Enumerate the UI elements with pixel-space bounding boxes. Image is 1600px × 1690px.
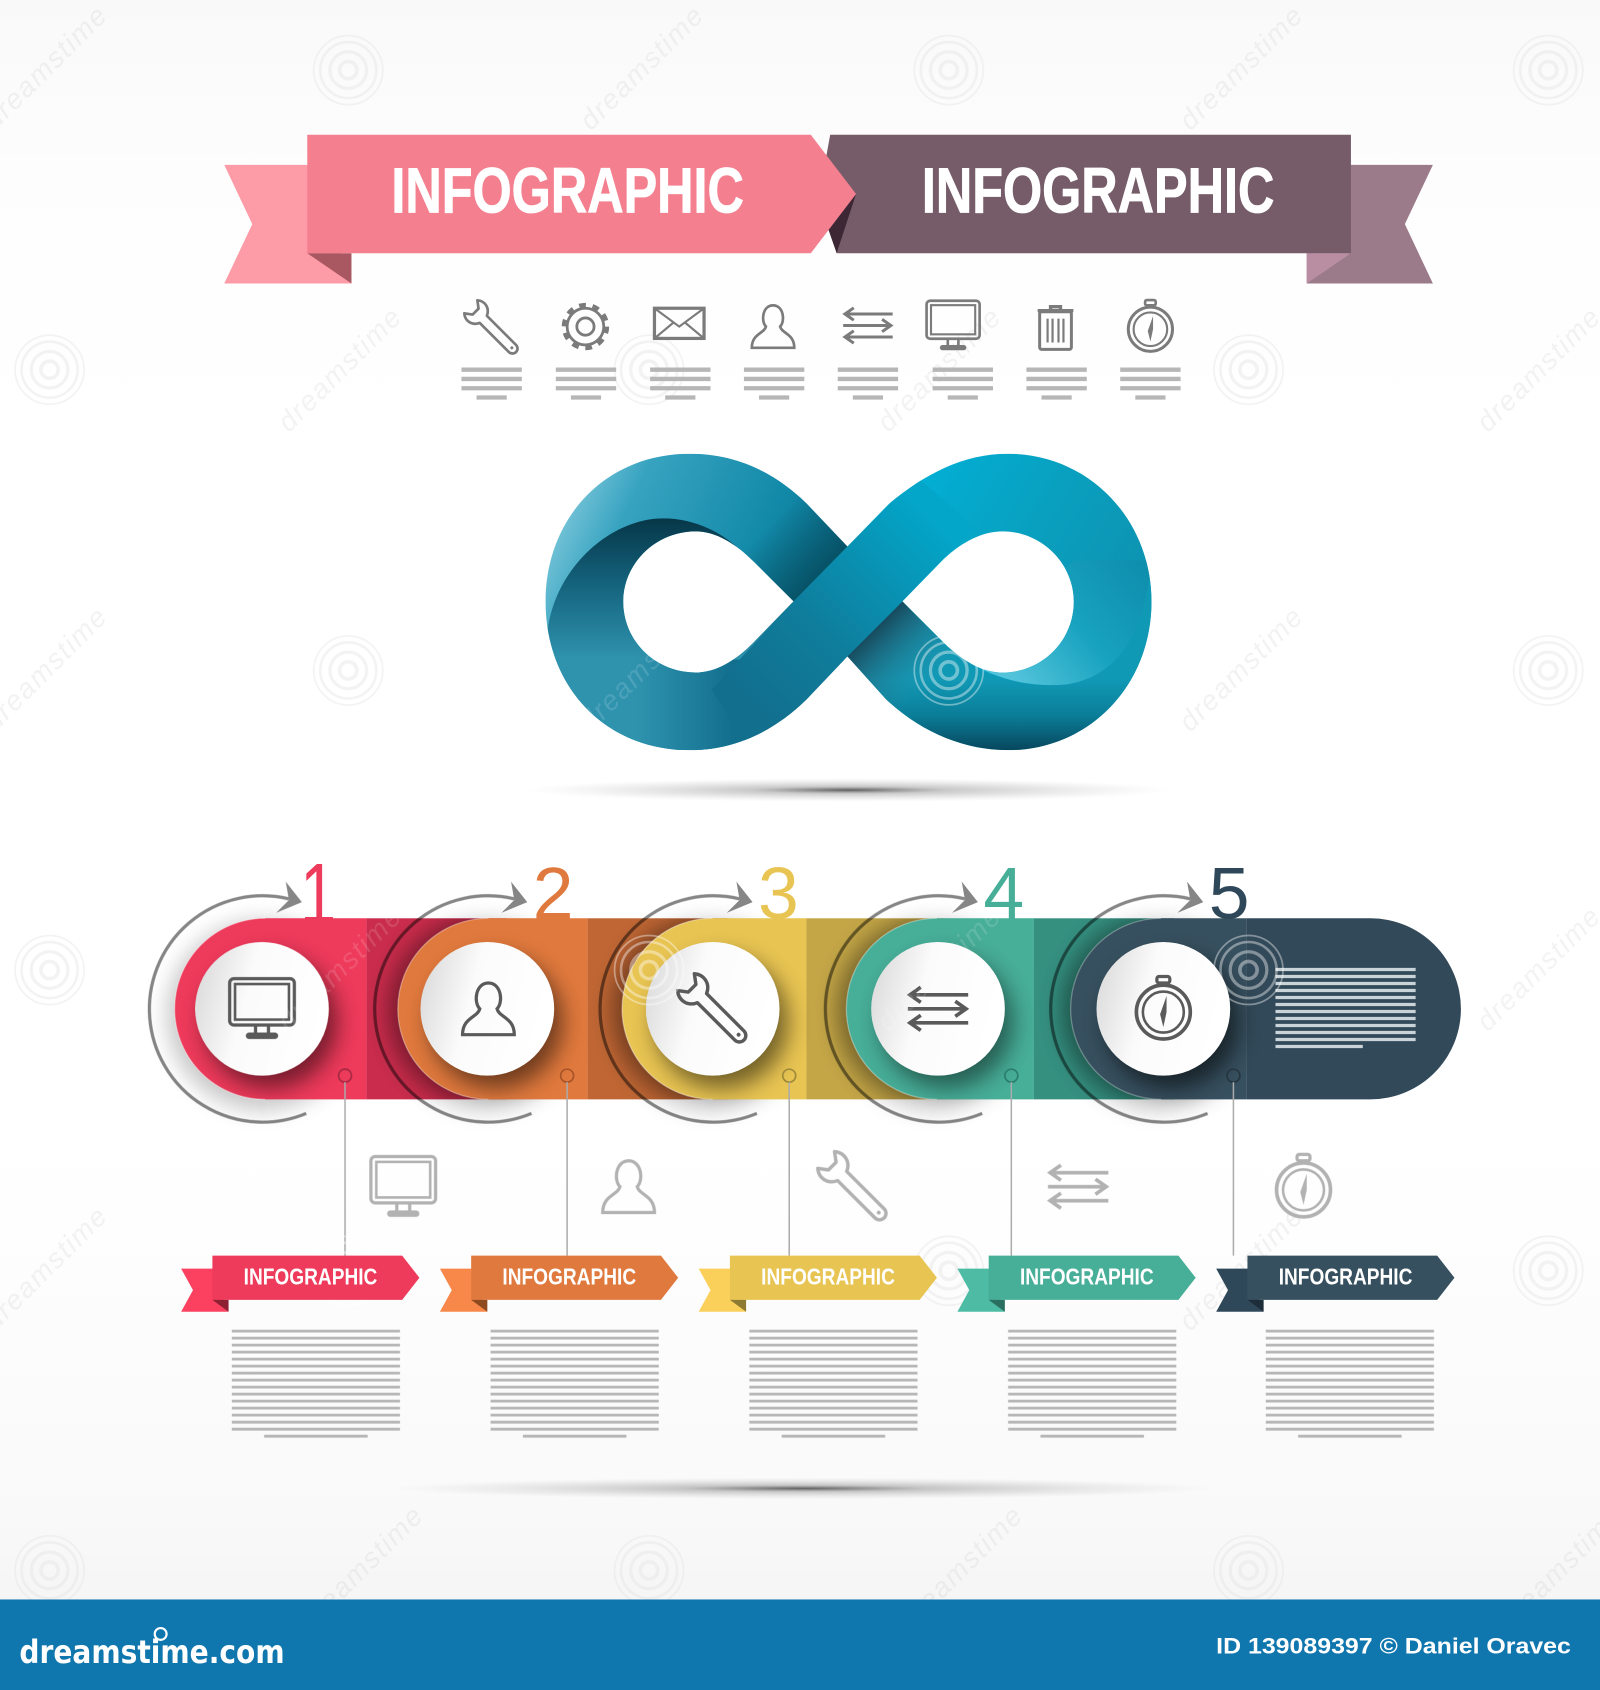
label ribbon 4 — [957, 1256, 1196, 1312]
lower icons row — [371, 1149, 1330, 1229]
footer logo: dreamstime.com — [19, 1633, 285, 1671]
footer credit: ID 139089397 © Daniel Oravec — [1216, 1633, 1571, 1658]
icon: arrows — [843, 308, 893, 343]
ribbon: right tail — [1307, 165, 1433, 283]
label ribbon 2 — [440, 1256, 678, 1312]
infinity symbol — [539, 447, 1164, 757]
watermark pattern: dreamstime — [871, 301, 1008, 438]
icon: person — [603, 1161, 654, 1213]
step timeline bar — [175, 916, 1461, 1106]
text block 1 — [232, 1331, 400, 1436]
text block 5 — [1266, 1331, 1434, 1436]
label ribbon 4: INFOGRAPHIC — [1020, 1264, 1154, 1290]
arc arrow 1 — [149, 882, 306, 1122]
icon: stopwatch — [1136, 976, 1190, 1039]
arc arrow 2 — [375, 882, 532, 1122]
segment 5 circle shadow — [1105, 955, 1239, 1089]
number 1: 1 — [300, 847, 336, 943]
number 2: 2 — [533, 852, 573, 934]
text lines in navy segment — [1275, 969, 1416, 1047]
icon: wrench — [675, 971, 755, 1051]
text block 3 — [749, 1331, 918, 1436]
icon: monitor — [927, 301, 980, 350]
ribbon: pink panel — [307, 135, 856, 253]
icon: stopwatch — [1128, 300, 1173, 351]
watermark pattern: dreamstime — [573, 0, 710, 136]
watermark pattern: dreamstime — [1173, 1200, 1309, 1336]
icon: arrows — [1048, 1165, 1108, 1208]
watermark pattern: dreamstime — [271, 301, 408, 438]
step 5 — [1051, 852, 1249, 1256]
step 3 — [600, 852, 799, 1256]
step 2 — [375, 852, 574, 1256]
number 3: 3 — [758, 852, 799, 934]
watermark pattern: dreamstime — [1173, 600, 1309, 737]
label ribbon 5 — [1216, 1256, 1454, 1312]
watermark spirals on colored areas: dreamstime — [573, 600, 710, 737]
segment 5: navy — [1061, 916, 1461, 1106]
white circle 4 — [871, 942, 1005, 1076]
white circle 2 — [420, 942, 554, 1076]
connector 4 — [1005, 1069, 1018, 1256]
icon: wrench — [815, 1149, 895, 1229]
ribbon: left tail — [224, 165, 351, 283]
arc arrow 5 — [1051, 882, 1208, 1122]
icon: envelope — [654, 308, 704, 338]
segment 3: yellow — [612, 916, 947, 1106]
heading: right: INFOGRAPHIC — [922, 155, 1274, 226]
arc arrow 3 — [600, 882, 757, 1122]
number 5: 5 — [1209, 852, 1249, 934]
connector 3 — [783, 1069, 796, 1256]
icon: arrows — [908, 987, 968, 1030]
icon captions — [461, 370, 1181, 397]
icon row — [462, 298, 1173, 361]
number 4: 4 — [983, 852, 1024, 934]
white circle 5 — [1096, 942, 1230, 1076]
label ribbon 1 — [181, 1256, 419, 1312]
segment 4 circle shadow — [880, 955, 1013, 1089]
label ribbon 1: INFOGRAPHIC — [244, 1264, 378, 1290]
segment 3 circle shadow — [654, 955, 788, 1089]
arc arrow 4 — [825, 882, 982, 1122]
white circle 1 — [195, 942, 329, 1076]
label ribbon 2: INFOGRAPHIC — [502, 1264, 636, 1290]
segment 1 circle shadow — [204, 955, 337, 1089]
bottom ground shadow — [394, 1478, 1213, 1499]
icon: trash — [1038, 307, 1073, 349]
icon: monitor — [230, 979, 294, 1039]
segment 2: orange — [388, 916, 728, 1106]
infinity ground shadow — [525, 778, 1172, 802]
footer logo spiral — [155, 1628, 167, 1640]
segment 1: red — [175, 918, 507, 1099]
label ribbon 5: INFOGRAPHIC — [1279, 1264, 1413, 1290]
footer band — [0, 1599, 1600, 1690]
icon: gear — [564, 305, 607, 348]
connector 5 — [1227, 1069, 1240, 1256]
icon: stopwatch — [1277, 1154, 1330, 1217]
label ribbon 3 — [699, 1256, 937, 1312]
white circle 3 — [646, 942, 780, 1076]
icon: monitor — [371, 1156, 436, 1217]
label ribbon 3: INFOGRAPHIC — [761, 1264, 895, 1290]
watermark spirals on colored areas — [271, 600, 1283, 1305]
connector 2 — [561, 1069, 574, 1256]
icon: person — [463, 983, 514, 1035]
icon: person — [752, 305, 794, 348]
disc drop shadows on background — [167, 920, 1253, 1110]
step 4 — [825, 852, 1024, 1256]
watermark spirals on colored areas: dreamstime — [871, 900, 1008, 1037]
ribbon: dark notch fold — [828, 194, 856, 253]
watermark pattern: dreamstime — [892, 1499, 1029, 1636]
text block 2 — [491, 1331, 659, 1436]
step 1 — [149, 882, 351, 1256]
ribbon: left fold — [307, 253, 351, 283]
watermark pattern: dreamstime — [293, 1499, 430, 1636]
watermark spirals on colored areas: dreamstime — [271, 900, 408, 1037]
text block 4 — [1008, 1331, 1176, 1436]
heading: left: INFOGRAPHIC — [391, 155, 744, 226]
title ribbon — [224, 135, 1433, 283]
ribbon: right fold — [1307, 253, 1351, 283]
watermark pattern: dreamstime — [1173, 0, 1309, 136]
ribbon: dark panel — [819, 135, 1351, 253]
connector 1 — [339, 1069, 351, 1256]
segment 4: green — [837, 916, 1174, 1106]
segment 2 circle shadow — [429, 955, 563, 1089]
icon: wrench — [462, 298, 525, 361]
